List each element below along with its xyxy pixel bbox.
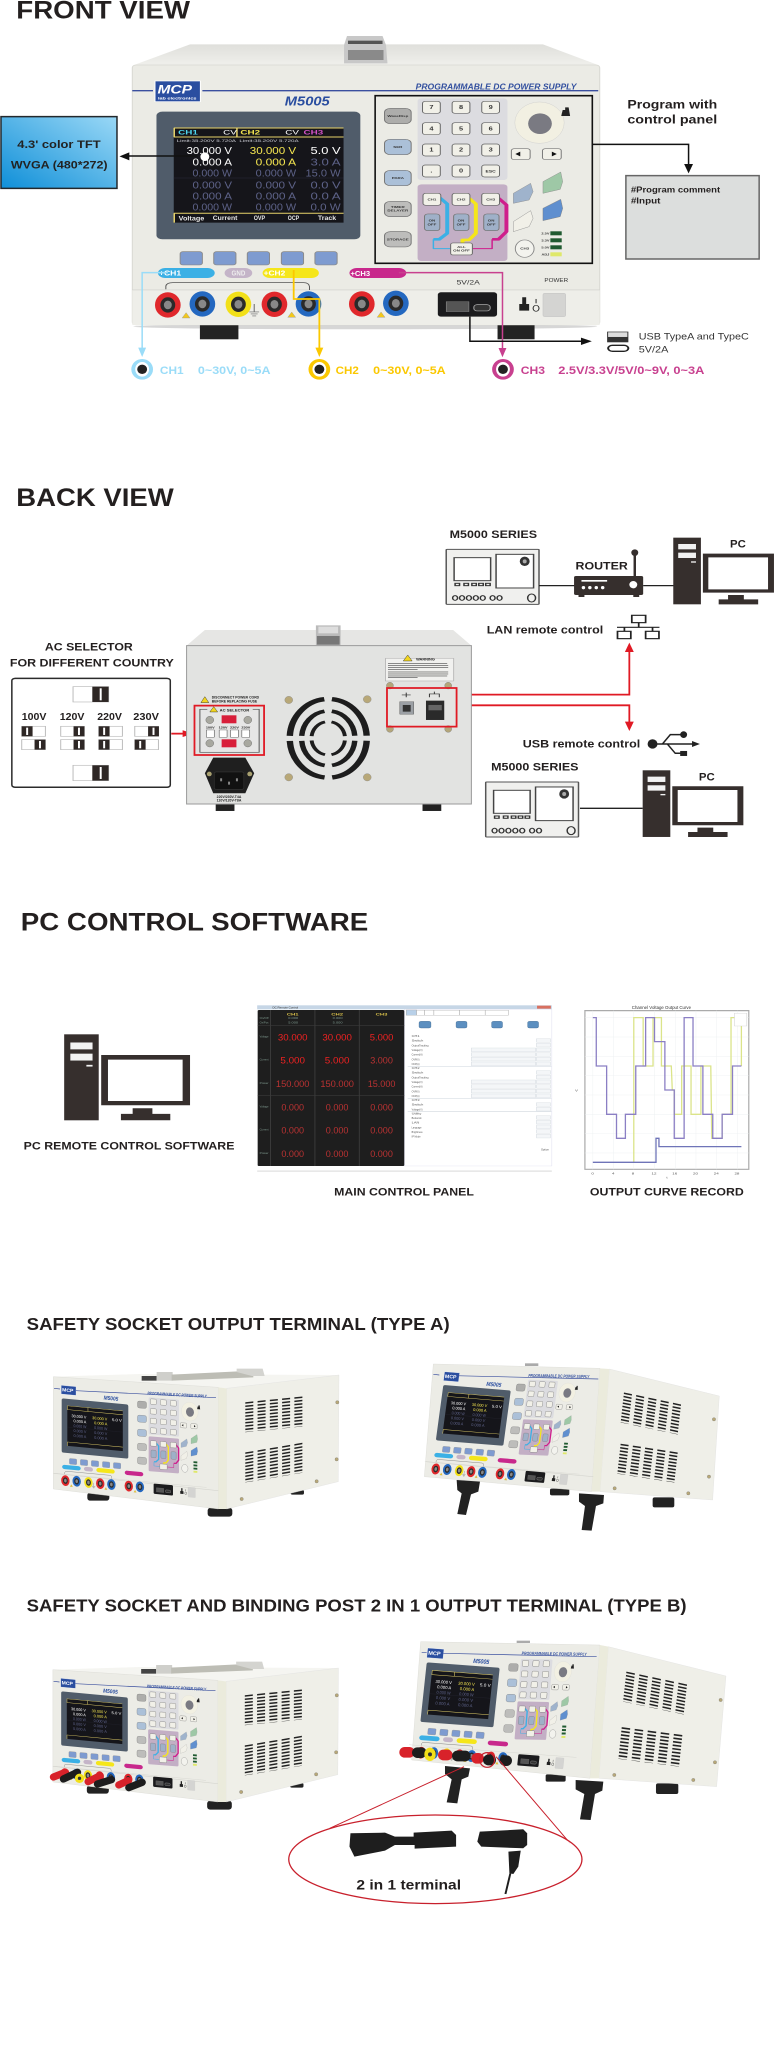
fuse warning — [201, 695, 259, 703]
chart: output curve: 16 — [672, 1172, 677, 1175]
label: AC selector: FOR DIFFERENT COUNTRY — [10, 656, 174, 669]
terminal labels — [159, 269, 370, 278]
screenshot: main control panel: 0.000 — [333, 1017, 343, 1020]
keypad labels: ON — [429, 219, 436, 222]
device: type A left view: 0.000 W — [94, 1425, 107, 1431]
panel: program comment: #Program comment — [631, 186, 720, 195]
device: type A left view: 5.0 V — [112, 1417, 122, 1423]
keypad labels: ON — [488, 219, 495, 222]
screen readout: Limit:35.200V 5.720A — [239, 139, 299, 144]
title: back view: BACK VIEW — [16, 483, 174, 512]
label: CH3 range: 2.5V/3.3V/5V/0~9V, 0~3A — [558, 364, 704, 376]
screenshot: main control panel: Voltage — [260, 1035, 269, 1038]
screenshot: main control panel — [257, 1005, 552, 1172]
section: 2 in 1 terminal callout — [289, 1753, 582, 1904]
heading: product line: PROGRAMMABLE DC POWER SUPPLY — [416, 82, 577, 92]
keypad labels: ESC — [486, 169, 496, 173]
AC selector block — [194, 706, 264, 755]
device: type B right view: 0.000 A — [437, 1685, 451, 1690]
screen readout: CV — [223, 128, 237, 136]
screenshot: main control panel: CH3 — [412, 1099, 420, 1102]
keypad labels: OFF — [487, 223, 496, 226]
screenshot: main control panel: OCP(A) — [412, 1063, 420, 1066]
device: type B right view: 0.000 A — [435, 1701, 450, 1706]
screenshot: main control panel: 30.000 — [322, 1033, 352, 1043]
screenshot: main control panel: OVP(V) — [412, 1090, 420, 1093]
keypad labels: ON OFF — [453, 249, 471, 252]
section: front view — [1, 0, 759, 380]
chart: output curve: t — [666, 1176, 669, 1179]
label: main control panel: MAIN CONTROL PANEL — [334, 1185, 474, 1198]
arrow: USB — [458, 705, 634, 731]
screen readout: 0.000 W — [193, 168, 232, 179]
device: type B left view: 0.000 V — [73, 1721, 86, 1727]
fan grille — [290, 699, 367, 778]
screenshot: main control panel: CH1 — [412, 1035, 420, 1038]
chart: output curve: 24 — [714, 1172, 719, 1175]
title: type A: SAFETY SOCKET OUTPUT TERMINAL (TYPE A) — [27, 1313, 450, 1334]
icon: PC top — [673, 538, 774, 604]
terminal labels: +CH3 — [350, 270, 370, 278]
panel: voltage switch settings: 220V — [97, 711, 123, 722]
icon: USB — [648, 731, 700, 756]
panel: program comment — [626, 176, 759, 259]
screen readout: 0.0 A — [310, 191, 342, 202]
screen readout: Voltage — [179, 215, 204, 222]
icon: terminal left — [349, 1831, 456, 1857]
device: type A right view: 0.000 W — [472, 1412, 486, 1418]
screenshot: main control panel: 0.000 — [326, 1150, 348, 1159]
screen readout: 0.000 V — [256, 180, 297, 191]
power inlet — [205, 758, 254, 802]
screenshot: main control panel: 150.000 — [276, 1080, 309, 1089]
device: type A right view: 0.000 A — [452, 1405, 466, 1411]
device: type B right view: PROGRAMMABLE DC POWER SUPPLY — [522, 1651, 588, 1657]
section: PC control software — [21, 908, 749, 1198]
keypad labels: ALL — [457, 246, 467, 249]
device: type B left view: M5005 — [103, 1688, 118, 1696]
screenshot: main control panel: Switch — [412, 1103, 423, 1106]
screenshot: main control panel: 0.000 — [370, 1103, 393, 1113]
connector: CH2 — [294, 270, 330, 380]
keypad labels: 1 — [429, 148, 434, 153]
device: type A right view: PROGRAMMABLE DC POWER SUPPLY — [528, 1373, 590, 1379]
keypad labels: CH3 — [486, 198, 495, 201]
label: PC remote control software: PC REMOTE CONTROL SOFTWARE — [24, 1139, 234, 1152]
icon: USB ports — [607, 332, 628, 351]
label: M5000 series bottom: M5000 SERIES — [491, 760, 578, 773]
device: type B right view — [405, 1641, 726, 1820]
device: type B left view: 0.000 A — [73, 1711, 86, 1717]
chart: output curve: V — [575, 1089, 579, 1092]
callout: display — [1, 117, 117, 188]
power inlet: 110V/120V-T8A — [217, 798, 241, 802]
device: type A right view: 0.000 V — [451, 1415, 465, 1421]
callout: display: WVGA (480*272) — [11, 158, 108, 171]
label: USB: 5V/2A — [639, 345, 668, 355]
device: type B right view: 30.000 V — [435, 1679, 452, 1685]
screen readout: Track — [318, 214, 337, 222]
screenshot: main control panel: OVP(V) — [412, 1058, 420, 1061]
screenshot: main control panel: Buttonck — [412, 1117, 422, 1120]
screenshot: main control panel: 5.000 — [333, 1021, 343, 1024]
label: AC selector: AC SELECTOR — [45, 640, 133, 653]
device: type A left view: MCP — [62, 1388, 74, 1394]
keypad labels: 2.5V — [541, 232, 550, 235]
screenshot: main control panel: Voltage(V) — [412, 1081, 423, 1084]
screenshot: main control panel: OutputTracking — [412, 1076, 429, 1079]
device: type A left view: 0.000 A — [94, 1420, 108, 1426]
screenshot: main control panel: 3.000 — [370, 1057, 393, 1066]
device: type A left view: 30.000 V — [92, 1415, 108, 1421]
device: type A right view: 0.000 V — [472, 1417, 486, 1423]
label: CH2 range: CH2 — [336, 364, 359, 376]
screen readout: 0.000 W — [193, 202, 232, 213]
chart: output curve: 28 — [734, 1172, 739, 1175]
keypad labels: DELAYER — [387, 209, 409, 212]
screenshot: main control panel: Switch — [412, 1039, 423, 1042]
terminal labels: +CH1 — [159, 269, 181, 277]
terminal labels: +CH2 — [264, 269, 285, 277]
device: type B right view: 0.000 W — [459, 1692, 475, 1697]
callout: 2 in 1 terminal — [289, 1815, 582, 1904]
screen readout: 0.000 A — [193, 191, 233, 202]
screenshot: main control panel: On/Pos — [260, 1021, 269, 1024]
device: type A right view — [423, 1363, 719, 1531]
screenshot: main control panel: CH2 — [331, 1012, 343, 1017]
power cables — [445, 1766, 603, 1820]
label: PC top: PC — [730, 537, 746, 550]
connector: CH1 — [131, 273, 168, 380]
device: type A left view: 0.000 A — [94, 1435, 108, 1441]
AC selector block: 220V — [230, 726, 240, 729]
screenshot: main control panel: OCP(A) — [412, 1095, 420, 1098]
cable — [580, 807, 643, 809]
screenshot: main control panel: 5.000 — [280, 1057, 305, 1066]
screen readout: CH1 — [178, 128, 198, 136]
device: type B left view: 0.000 A — [94, 1728, 107, 1734]
screenshot: main control panel: 15.000 — [368, 1080, 395, 1089]
label: CH3 range — [521, 364, 704, 376]
keypad labels: 5 — [459, 126, 464, 132]
AC selector block: 230V — [241, 726, 251, 729]
screenshot: main control panel: 0.000 — [326, 1127, 348, 1136]
panel: voltage switch settings — [12, 678, 170, 787]
panel: voltage switch settings: 230V — [133, 711, 160, 722]
icon: instrument top — [446, 549, 539, 604]
chart: output curve: 20 — [693, 1172, 698, 1175]
keypad labels: TIMER — [391, 206, 405, 209]
panel: voltage switch settings: 100V — [22, 711, 47, 722]
keypad labels: CH2 — [457, 198, 465, 201]
device: type B left view: PROGRAMMABLE DC POWER SUPPLY — [147, 1684, 207, 1692]
screenshot: main control panel: Voltage(V) — [412, 1049, 423, 1052]
screenshot: main control panel: 150.000 — [320, 1080, 354, 1089]
keypad labels: WaveDisp — [387, 115, 409, 118]
device: type A left view: PROGRAMMABLE DC POWER SUPPLY — [147, 1391, 208, 1399]
fuse warning: BEFORE REPLACING FUSE — [212, 699, 257, 703]
keypad labels: . — [430, 169, 433, 174]
screenshot: main control panel: On/Off — [260, 1017, 269, 1020]
screenshot: main control panel: Language — [412, 1126, 422, 1129]
keypad labels: 3.3V — [541, 239, 550, 242]
screen readout: 0.000 V — [193, 180, 233, 191]
screen readout: CV — [285, 128, 299, 136]
device: type A right view: M5005 — [486, 1381, 502, 1389]
section: back view — [10, 483, 774, 837]
screen readout: 3.0 A — [310, 157, 342, 168]
screenshot: main control panel: DC Remote Control — [272, 1006, 298, 1009]
screen readout: 0.000 W — [256, 202, 297, 213]
device: type B left view: 0.000 V — [94, 1723, 107, 1729]
keypad labels: 3 — [489, 148, 493, 153]
device: type B right view: M5005 — [473, 1658, 490, 1666]
device: type A left view: 0.000 A — [73, 1433, 87, 1439]
keypad labels: SER — [393, 146, 403, 149]
arrow: AC selector — [171, 730, 193, 737]
label: PC bottom: PC — [699, 770, 715, 783]
screen readout: 30.000 V — [250, 145, 297, 156]
screenshot: main control panel: Current — [260, 1128, 269, 1131]
device: type A left view: 0.000 V — [94, 1430, 108, 1436]
device: type A left view: 0.000 W — [73, 1423, 86, 1429]
screen readout: OCP — [288, 214, 299, 222]
screenshot: main control panel: Current(A) — [412, 1085, 423, 1088]
device: type A right view: 30.000 V — [451, 1400, 467, 1406]
screenshot: main control panel: Power — [260, 1082, 269, 1085]
screen readout: Limit:35.200V 5.720A — [177, 139, 237, 144]
keypad labels: OFF — [427, 223, 437, 226]
label: CH3 range: CH3 — [521, 364, 545, 376]
terminal labels: GND — [231, 269, 245, 277]
device: type B left view: MCP — [62, 1681, 73, 1687]
icon: instrument bottom — [486, 782, 578, 837]
screen readout: 15.0 W — [306, 168, 341, 179]
device: type B right view: MCP — [428, 1651, 441, 1657]
device: type A right view: 0.000 A — [450, 1421, 464, 1426]
binding posts right — [405, 1752, 507, 1761]
label: USB — [639, 331, 749, 355]
callout: zoom lines — [330, 1753, 570, 1843]
device: type A left view — [53, 1369, 339, 1517]
device: type A right view: 0.000 A — [471, 1422, 485, 1428]
chart: output curve: 0 — [591, 1172, 594, 1175]
device: rear panel — [187, 625, 471, 811]
fuse warning: DISCONNECT POWER CORD — [212, 695, 259, 699]
device: type B right view: 5.0 V — [480, 1682, 491, 1688]
screen readout: 0.0 W — [310, 202, 341, 213]
highlighted ports — [386, 682, 457, 732]
keypad labels: 8 — [459, 105, 464, 111]
device: type A right view: 5.0 V — [492, 1404, 502, 1409]
screenshot: main control panel: 0.000 — [281, 1127, 304, 1136]
screenshot: main control panel: CH2 — [412, 1067, 420, 1070]
chart: output curve: 4 — [612, 1172, 615, 1175]
device: type B right view: 0.000 V — [436, 1695, 450, 1701]
binding posts left — [53, 1772, 142, 1788]
screenshot: main control panel: 0.000 — [281, 1150, 304, 1159]
keypad labels: PARA — [392, 177, 404, 180]
device: M5005 front panel — [132, 36, 600, 339]
screenshot: main control panel: Switch — [412, 1071, 423, 1074]
callout: program with control panel: control panel — [627, 113, 717, 126]
power inlet: 220V/230V-T4A — [217, 795, 241, 799]
screenshot: main control panel: 0.000 — [288, 1017, 298, 1020]
device: type B right view: 0.000 A — [459, 1686, 474, 1692]
device: type A right view: MCP — [445, 1374, 457, 1381]
label: CH1 range: CH1 — [160, 364, 184, 376]
device: type B right view: 0.000 V — [458, 1697, 473, 1703]
screenshot: main control panel: 0.000 — [281, 1103, 304, 1113]
screenshot: main control panel: OutputTracking — [412, 1044, 429, 1047]
screenshot: main control panel: Voltage — [260, 1105, 269, 1108]
screenshot: main control panel: 5.000 — [288, 1021, 298, 1024]
screen readout: CH2 — [240, 128, 260, 136]
screenshot: main control panel: 0.000 — [326, 1103, 348, 1113]
chart: output curve: 8 — [632, 1172, 634, 1175]
screenshot: main control panel: 5.000 — [325, 1057, 349, 1066]
panel: program comment: #Input — [631, 197, 661, 206]
keypad labels: 2 — [459, 148, 464, 153]
device: type B left view: 0.000 W — [73, 1716, 86, 1722]
device: type B right view: 0.000 W — [436, 1690, 452, 1696]
keypad labels: 4 — [429, 126, 434, 132]
screenshot: main control panel: 0.000 — [370, 1127, 393, 1136]
device: type A left view: 0.000 V — [73, 1428, 87, 1434]
keypad labels: CH1 — [427, 198, 436, 201]
label: CH1 range — [160, 364, 270, 376]
device: M5005 front panel: 5V/2A — [457, 278, 480, 286]
device: type A right view: 0.000 A — [473, 1407, 487, 1413]
callout: program with control panel: Program with — [627, 98, 717, 112]
keypad labels: 0 — [459, 169, 464, 174]
icon: PC — [64, 1034, 190, 1120]
label: 2 in 1 terminal: 2 in 1 terminal — [356, 1877, 461, 1892]
keypad labels: ADJ — [541, 253, 550, 256]
device: type A left view: M5005 — [104, 1395, 119, 1403]
keypad labels — [387, 105, 550, 256]
callout: display: 4.3' color TFT — [17, 138, 101, 150]
keypad labels: 7 — [429, 105, 434, 111]
keypad labels: CH3 — [520, 247, 529, 250]
warning label — [386, 655, 454, 681]
keypad labels: OFF — [457, 223, 466, 226]
keypad labels: ON — [458, 219, 465, 222]
arrow: display callout — [119, 152, 209, 161]
connector: CH3 — [399, 273, 514, 380]
screenshot: main control panel: 0.000 — [370, 1150, 393, 1159]
router: ROUTER — [576, 560, 628, 573]
screenshot: main control panel: IP Mode — [412, 1135, 421, 1138]
keypad labels: 9 — [489, 105, 493, 111]
warning label: WARNING — [416, 657, 435, 661]
screenshot: main control panel: Utility — [412, 1112, 422, 1115]
screen readout: 0.0 V — [310, 180, 341, 191]
device: type A left view: 0.000 A — [73, 1418, 87, 1424]
chart: output curve — [575, 1006, 749, 1179]
screenshot: main control panel: CH3 — [376, 1012, 388, 1017]
fan screws — [285, 696, 371, 781]
AC selector block: 100V — [206, 726, 216, 729]
screen readout: 30.000 V — [187, 145, 233, 156]
device: type B left view: 5.0 V — [112, 1710, 122, 1716]
screenshot: main control panel: CH1 — [287, 1012, 299, 1017]
screen readout: 0.000 W — [256, 168, 297, 179]
AC selector block: AC SELECTOR — [220, 708, 250, 713]
device: M5005 front panel: POWER — [544, 277, 568, 284]
keypad labels: STORAGE — [387, 238, 409, 241]
device: type A left view: 30.000 V — [72, 1413, 87, 1420]
screen readout: 5.0 V — [310, 145, 341, 156]
label: M5000 series top: M5000 SERIES — [450, 528, 537, 540]
device: type B right view: 30.000 V — [458, 1681, 475, 1687]
label: LAN remote control: LAN remote control — [487, 623, 603, 636]
label: CH2 range: 0~30V, 0~5A — [373, 364, 446, 376]
icon: PC bottom — [643, 770, 743, 837]
model: M5005: M5005 — [285, 93, 330, 108]
screen readout: 0.000 A — [256, 157, 297, 168]
arrow: LAN — [458, 643, 634, 695]
screen readout: Current — [213, 214, 238, 222]
device: type B left view: 0.000 W — [94, 1718, 107, 1724]
device: type B left view: 30.000 V — [71, 1706, 86, 1713]
connector: USB — [470, 317, 592, 345]
title: PC control software: PC CONTROL SOFTWARE — [21, 908, 368, 936]
device: type B left view — [53, 1662, 338, 1810]
screenshot: main control panel: Voltage(V) — [412, 1108, 423, 1111]
label: CH2 range — [336, 364, 446, 376]
screenshot: main control panel: LAN — [412, 1121, 420, 1124]
screen readout: OVP — [254, 214, 265, 222]
screenshot: main control panel: Power — [260, 1152, 269, 1155]
AC selector block: 120V — [219, 726, 228, 729]
screen readout: 0.000 A — [256, 191, 297, 202]
device: type A right view: 0.000 W — [451, 1410, 465, 1416]
logo: MCP: lab electronics — [158, 96, 197, 100]
arrow: control panel — [592, 144, 693, 173]
device: type B left view: 0.000 A — [94, 1713, 107, 1719]
device: type B left view: 30.000 V — [92, 1708, 107, 1714]
panel: voltage switch settings: 120V — [60, 711, 85, 722]
label: CH1 range: 0~30V, 0~5A — [198, 364, 270, 376]
screenshot: main control panel: Option — [541, 1148, 549, 1151]
screenshot: main control panel: Current — [260, 1058, 269, 1061]
screen readout: CH3 — [304, 128, 324, 136]
screenshot: main control panel: 30.000 — [278, 1033, 308, 1043]
screen readout — [177, 128, 342, 222]
chart: output curve: Channel Voltage Output Curve — [632, 1006, 691, 1011]
device: type A right view: 30.000 V — [472, 1402, 488, 1408]
icon: network — [617, 615, 659, 639]
label: USB remote control: USB remote control — [523, 737, 640, 750]
keypad labels: 6 — [489, 126, 493, 132]
screenshot: main control panel: Current(A) — [412, 1053, 423, 1056]
icon: terminal right — [477, 1829, 527, 1894]
screen readout: 0.000 A — [193, 157, 233, 168]
chart: output curve: 12 — [652, 1172, 656, 1175]
router — [539, 549, 674, 597]
screenshot: main control panel: Brightness — [412, 1131, 423, 1134]
device: type B left view: 0.000 A — [73, 1726, 86, 1732]
logo: MCP: MCP — [157, 83, 193, 96]
keypad labels: 5.0V — [541, 246, 550, 249]
power cables — [457, 1480, 604, 1531]
device: type B right view: 0.000 A — [458, 1702, 473, 1708]
screenshot: main control panel: 5.000 — [370, 1033, 393, 1043]
